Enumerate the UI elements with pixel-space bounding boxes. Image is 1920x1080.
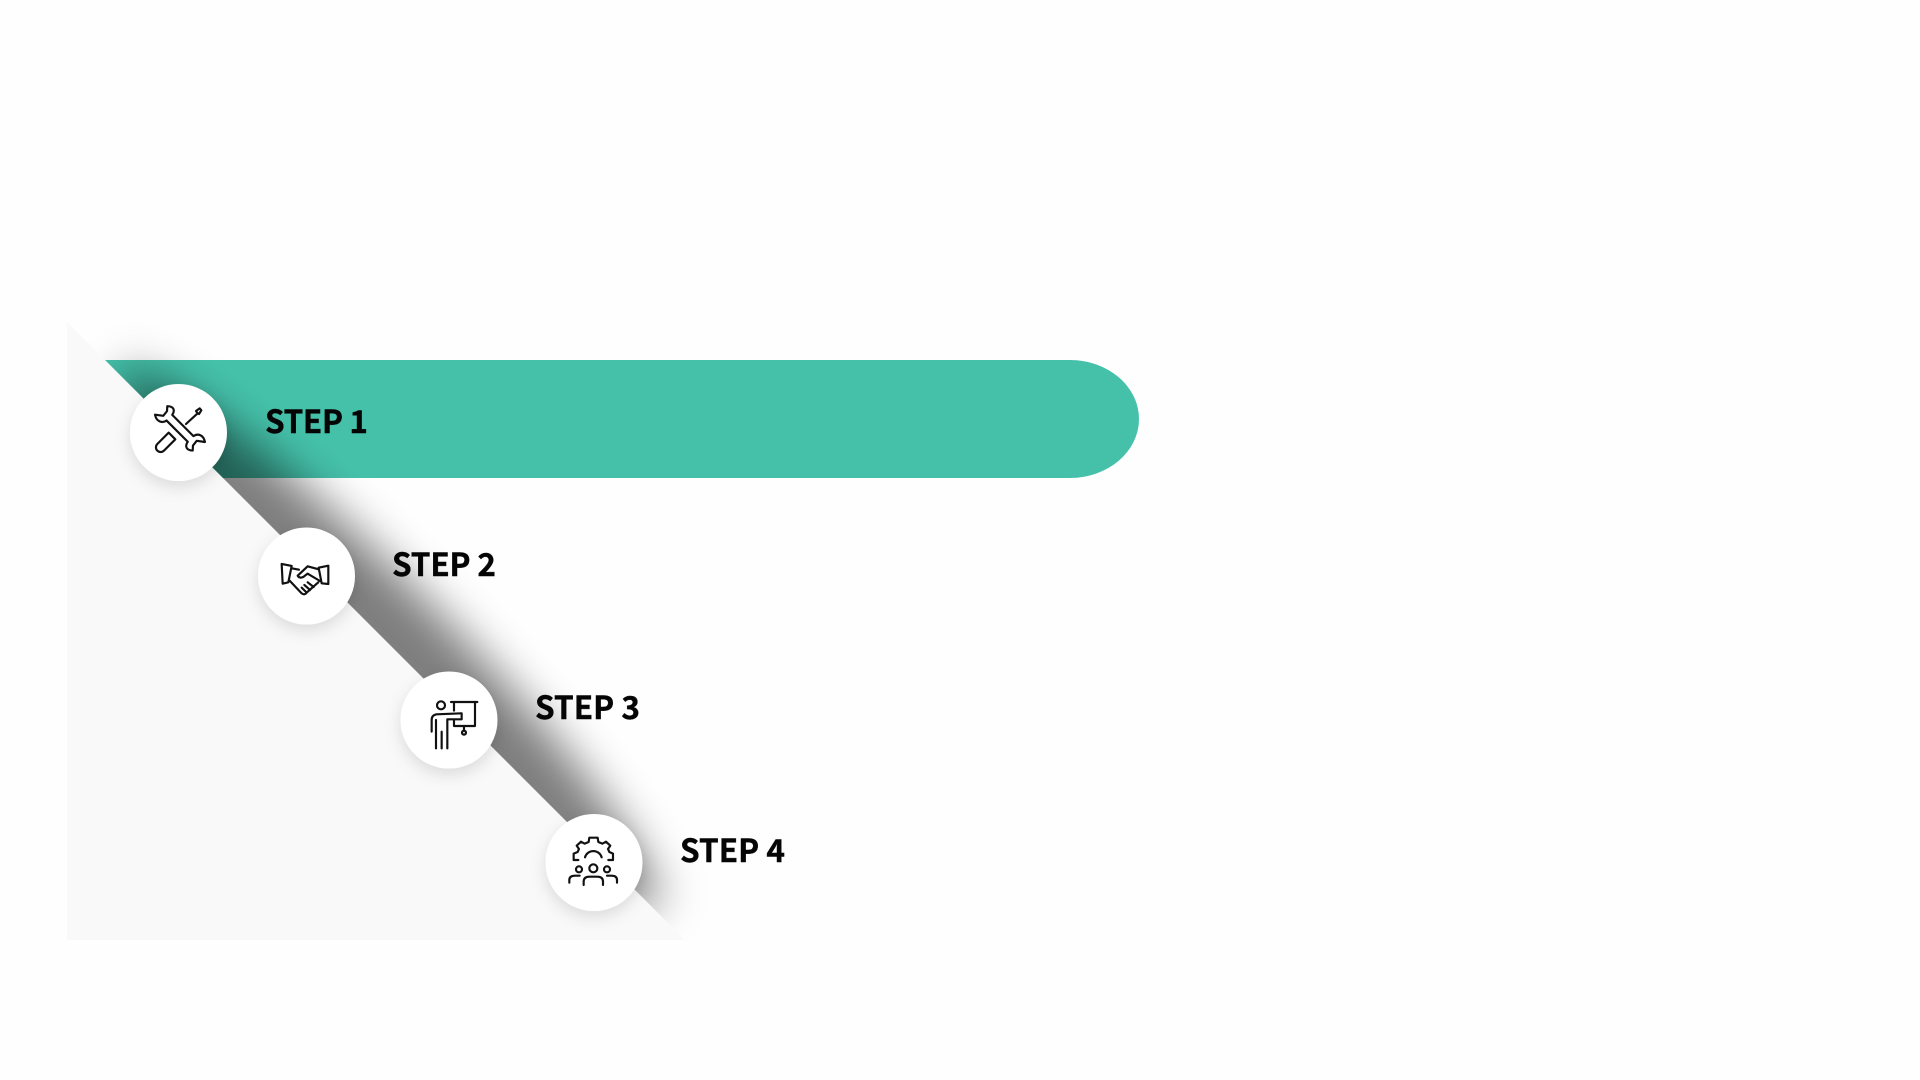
step 2 circle	[258, 528, 355, 624]
icon: handshake	[282, 564, 328, 594]
step 3 circle	[400, 672, 498, 768]
label: step 3: STEP 3	[535, 683, 640, 729]
icon: wrench and screwdriver	[154, 402, 206, 455]
panel: grey triangle	[67, 322, 685, 940]
diagonal shadow	[106, 346, 684, 924]
step 1 circle	[130, 384, 227, 481]
icon: team and gear	[569, 838, 617, 885]
label: step 2: STEP 2	[392, 540, 496, 586]
step 1 teal bar	[105, 360, 1139, 478]
icon: presenter at board	[432, 701, 477, 748]
step 4 circle	[546, 814, 642, 911]
label: step 4: STEP 4	[680, 826, 785, 872]
label: step 1: STEP 1	[265, 397, 368, 443]
